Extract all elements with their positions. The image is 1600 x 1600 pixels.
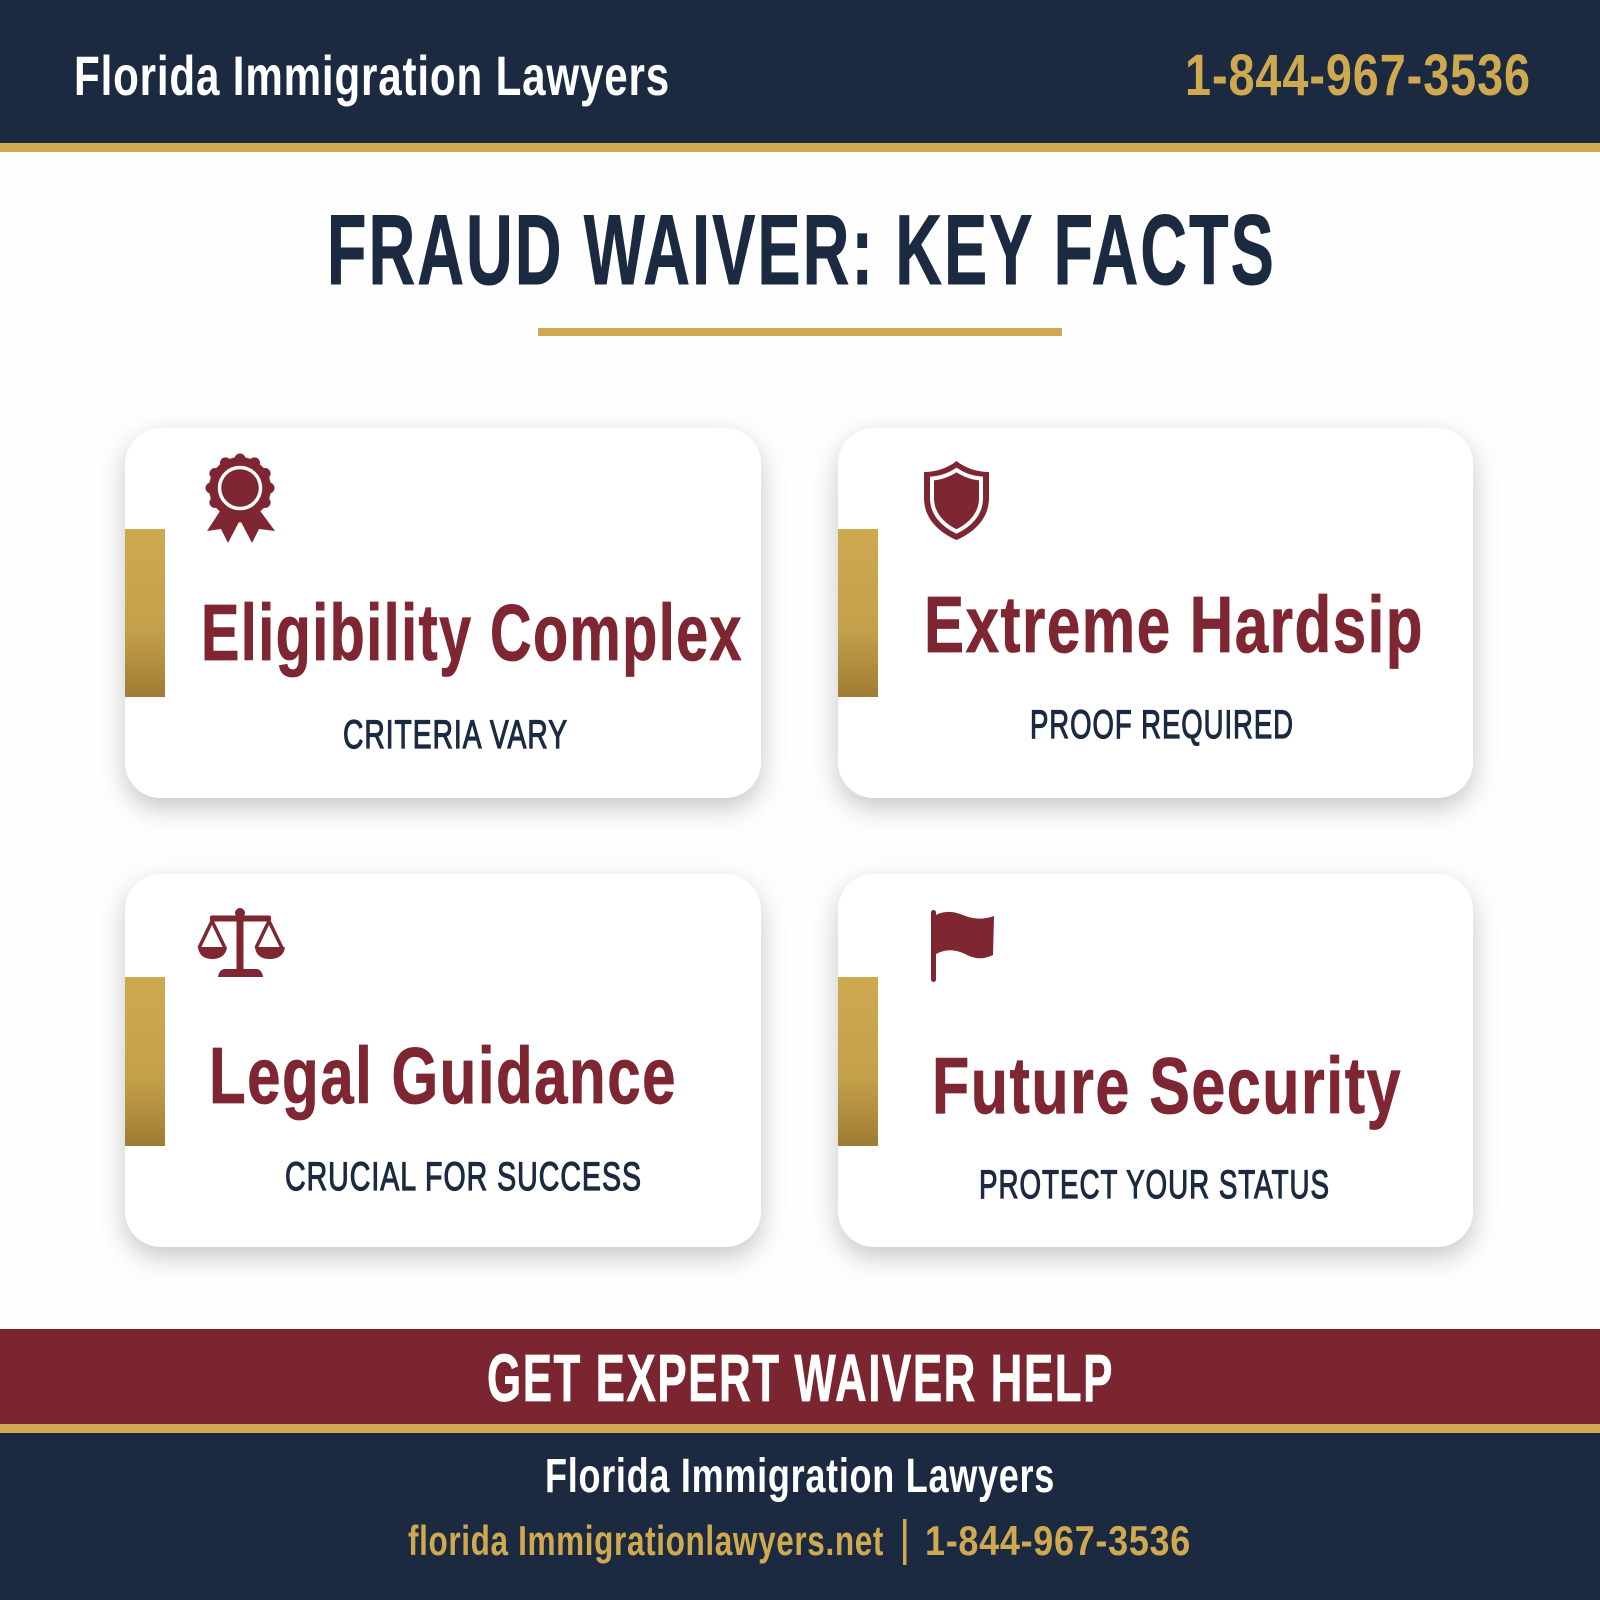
- gold divider: [0, 1424, 1600, 1433]
- footer firm name: Florida Immigration Lawyers: [545, 1450, 1055, 1503]
- icon: shield: [924, 461, 989, 540]
- footer separator: [903, 1519, 906, 1565]
- heading: Future Security: [932, 1041, 1402, 1130]
- footer website: florida Immigrationlawyers.net: [408, 1517, 884, 1564]
- call to action band: [0, 1329, 1600, 1424]
- call to action text: GET EXPERT WAIVER HELP: [487, 1341, 1114, 1416]
- footer: [0, 1433, 1600, 1600]
- panel: legal guidance: [125, 874, 761, 1247]
- icon: scales of justice: [198, 908, 285, 977]
- subtext: PROOF REQUIRED: [1030, 703, 1294, 747]
- header firm name: Florida Immigration Lawyers: [74, 44, 670, 107]
- icon: flag: [931, 910, 994, 982]
- title underline: [538, 328, 1062, 336]
- footer phone number: 1-844-967-3536: [925, 1517, 1191, 1564]
- panel: extreme hardship: [838, 428, 1473, 798]
- icon: ribbon award: [206, 454, 275, 543]
- subtext: PROTECT YOUR STATUS: [979, 1163, 1330, 1207]
- heading: Eligibility Complex: [201, 588, 743, 677]
- panel: eligibility complex: [125, 428, 761, 798]
- panel: future security: [838, 874, 1473, 1247]
- header bar: [0, 0, 1600, 152]
- heading: Extreme Hardsip: [924, 580, 1424, 669]
- subtext: CRITERIA VARY: [343, 713, 568, 757]
- heading: Legal Guidance: [209, 1031, 677, 1120]
- subtext: CRUCIAL FOR SUCCESS: [285, 1155, 642, 1199]
